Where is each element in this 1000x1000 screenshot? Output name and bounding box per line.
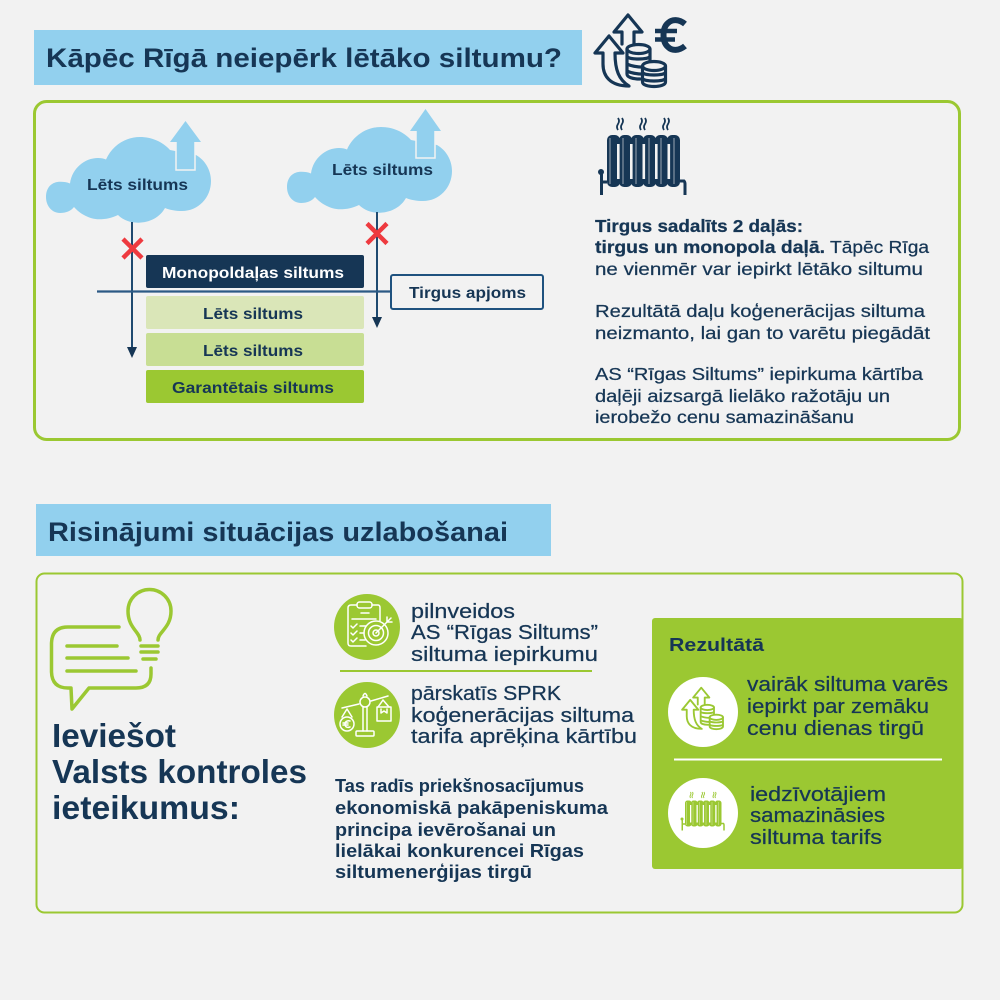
- text: pārskatīs SPRK: pārskatīs SPRK: [411, 683, 562, 705]
- arrow: right supply line: [372, 212, 382, 328]
- text: pārskatīs SPRK: tarifa aprēķina kārtību: [411, 726, 637, 748]
- text: pārskatīs SPRK: koģenerācijas siltuma: [411, 705, 635, 727]
- text block: market explanation: ne vienmēr var iepirkt lētāko siltumu: [595, 259, 923, 279]
- cloud 2 with up arrow: [287, 109, 452, 213]
- text: residents tariff falls: iedzīvotājiem: [750, 784, 886, 806]
- text: more heat at lower price: cenu dienas tirgū: [747, 718, 924, 740]
- cloud 1 with up arrow: [46, 121, 211, 223]
- icon: red cross right: [367, 224, 387, 244]
- heading: Risinājumi situācijas uzlabošanai: [36, 504, 551, 556]
- text: pilnveidos AS Rīgas Siltums: siltuma iepirkumu: [411, 644, 598, 666]
- text: pilnveidos AS Rīgas Siltums: [411, 601, 598, 666]
- icon: arrows, coins and euro: [595, 15, 685, 86]
- icon: radiator: [598, 118, 685, 195]
- heading: Ieviešot Valsts kontroles ieteikumus: ieteikumus:: [52, 789, 240, 826]
- text: pilnveidos AS Rīgas Siltums: pilnveidos: [411, 601, 515, 623]
- bar: Lēts siltums light: Lēts siltums: [203, 306, 303, 323]
- text block: consequences: siltumenerģijas tirgū: [335, 862, 532, 882]
- bar: Lēts siltums light: [146, 296, 364, 329]
- bar: Lēts siltums medium: Lēts siltums: [203, 343, 303, 360]
- bar: Monopoldaļas siltums: Monopoldaļas siltums: [162, 265, 344, 282]
- cloud 1 with up arrow: Lēts siltums: [87, 177, 188, 194]
- title: Kāpēc Rīgā neiepērk lētāko siltumu: [34, 30, 582, 85]
- text: more heat at lower price: [747, 674, 948, 740]
- text block: consequences: principa ievērošanai un: [335, 820, 556, 840]
- bar: Garantētais siltums: Garantētais siltums: [172, 380, 334, 397]
- label box: Tirgus apjoms: [391, 275, 543, 309]
- bar: Garantētais siltums: [146, 370, 364, 403]
- text: pilnveidos AS Rīgas Siltums: AS “Rīgas Siltums”: [411, 622, 598, 644]
- text: residents tariff falls: [750, 784, 886, 849]
- text block: market explanation: [595, 216, 930, 427]
- icon: speech bubble with light bulb: [52, 590, 171, 709]
- panel: solutions: [36, 574, 963, 912]
- icon: radiator in white circle: [668, 778, 738, 848]
- icon: red cross left: [123, 239, 142, 258]
- heading: Risinājumi situācijas uzlabošanai: Risinājumi situācijas uzlabošanai: [48, 517, 508, 547]
- arrow: left supply line: [127, 222, 137, 358]
- heading: Rezultātā: Rezultātā: [669, 635, 765, 655]
- text: pārskatīs SPRK: [411, 683, 637, 748]
- text block: market explanation: ierobežo cenu samazināšanu: [595, 407, 854, 427]
- text: more heat at lower price: iepirkt par zemāku: [747, 696, 929, 718]
- label box: Tirgus apjoms: Tirgus apjoms: [409, 285, 526, 302]
- icon: clipboard with target: [334, 594, 400, 660]
- text: residents tariff falls: samazināsies: [750, 805, 885, 827]
- title: Kāpēc Rīgā neiepērk lētāko siltumu: Kāpēc Rīgā neiepērk lētāko siltumu?: [46, 43, 562, 73]
- text block: consequences: [335, 776, 609, 882]
- text block: market explanation: Tāpēc Rīga: [830, 237, 929, 257]
- text block: market explanation: Rezultātā daļu koģenerācijas siltuma: [595, 301, 925, 321]
- text: residents tariff falls: siltuma tarifs: [750, 827, 882, 849]
- text block: market explanation: neizmanto, lai gan to varētu piegādāt: [595, 323, 930, 343]
- heading: Ieviešot Valsts kontroles ieteikumus: Valsts kontroles: [52, 753, 307, 790]
- text block: market explanation: tirgus un monopola daļā.: [595, 237, 825, 257]
- bar: Lēts siltums medium: [146, 333, 364, 366]
- text block: market explanation: AS “Rīgas Siltums” iepirkuma kārtība: [595, 364, 923, 384]
- bar: Monopoldaļas siltums: [146, 255, 364, 288]
- text block: consequences: Tas radīs priekšnosacījumus: [335, 776, 584, 796]
- text: more heat at lower price: vairāk siltuma varēs: [747, 674, 948, 696]
- heading: Ieviešot Valsts kontroles ieteikumus: [52, 717, 307, 826]
- text block: consequences: ekonomiskā pakāpeniskuma: [335, 798, 609, 818]
- cloud 2 with up arrow: Lēts siltums: [332, 162, 433, 179]
- panel: result: [652, 618, 963, 869]
- panel: why Riga does not buy cheaper heat: [34, 102, 960, 440]
- market volume line: [97, 290, 391, 293]
- text block: market explanation: Tirgus sadalīts 2 daļās:: [595, 216, 803, 236]
- icon: coins in white circle: [668, 677, 738, 747]
- heading: Ieviešot Valsts kontroles ieteikumus: Ieviešot: [52, 717, 176, 754]
- text block: consequences: lielākai konkurencei Rīgas: [335, 841, 584, 861]
- text block: market explanation: daļēji aizsargā lielāko ražotāju un: [595, 386, 890, 406]
- icon: balance scale with euro: [334, 682, 400, 748]
